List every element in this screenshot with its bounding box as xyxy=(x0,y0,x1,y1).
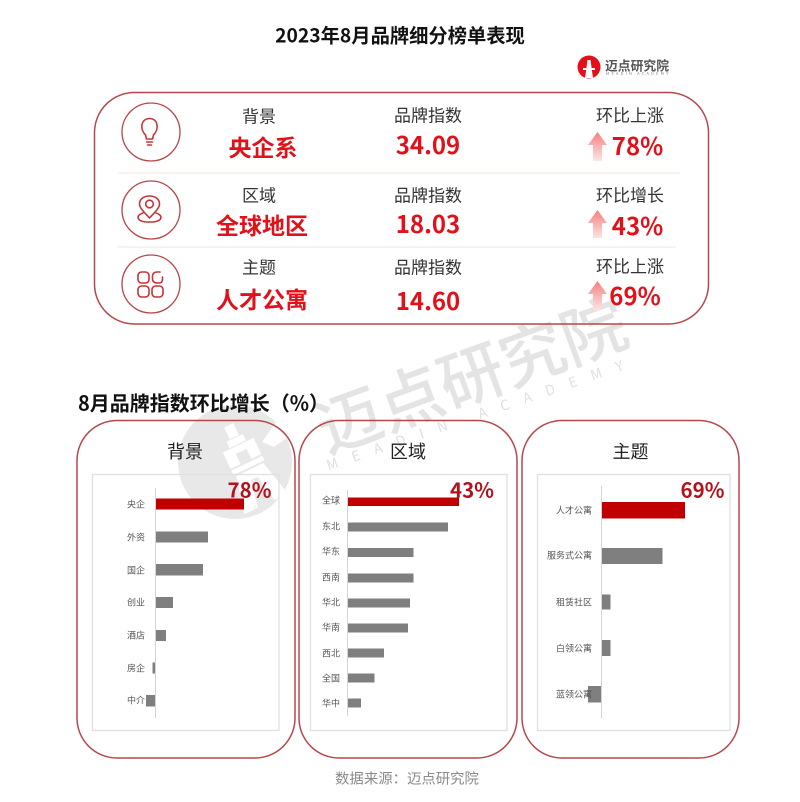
bar chart: 人才公寓 xyxy=(556,504,592,516)
row value: 人才公寓: 人才公寓 xyxy=(216,281,308,315)
bar chart xyxy=(127,474,272,718)
row label: 区域: 区域 xyxy=(242,182,276,206)
section heading: 8月品牌指数环比增长（%） xyxy=(78,388,329,416)
bar chart: 房企 xyxy=(127,662,145,674)
panel heading: 区域 xyxy=(390,438,426,464)
bar chart: 华北 xyxy=(322,596,340,608)
title: 2023年8月品牌细分榜单表现 xyxy=(275,20,525,48)
brand index label row 3: 品牌指数 xyxy=(394,254,462,278)
icon: light bulb xyxy=(122,103,180,161)
panel heading: 主题 xyxy=(612,438,648,464)
bar chart xyxy=(322,474,494,716)
bar chart: 服务式公寓 xyxy=(547,548,592,562)
watermark: 迈点研究院 xyxy=(301,272,639,472)
bar chart: 全球 xyxy=(322,494,340,506)
brand index value row 1: 34.09 xyxy=(396,126,460,161)
bar chart: 华东 xyxy=(322,544,340,558)
change label row 2: 环比增长 xyxy=(596,182,664,206)
change value row 2: 43% xyxy=(612,207,663,242)
bar chart: 东北 xyxy=(322,520,340,532)
bar chart: 创业 xyxy=(127,596,145,608)
panel: 主题 xyxy=(522,420,739,758)
bar chart: 国企 xyxy=(127,564,145,576)
row label: 主题: 主题 xyxy=(242,254,276,278)
data source: 数据来源：迈点研究院 xyxy=(335,768,479,788)
row label: 背景: 背景 xyxy=(242,102,276,128)
bar chart: 租赁社区 xyxy=(556,596,592,608)
icon: grid xyxy=(122,255,180,313)
change value row 1: 78% xyxy=(612,127,663,162)
bar chart: 69% xyxy=(681,474,725,504)
panel: 区域 xyxy=(299,420,517,758)
bar chart: 华中 xyxy=(322,696,340,710)
bar chart: 白领公寓 xyxy=(556,642,592,654)
watermark xyxy=(178,272,640,519)
bar chart: 西北 xyxy=(322,646,340,660)
change label row 3: 环比上涨 xyxy=(596,252,664,278)
change value row 3: 69% xyxy=(609,277,661,312)
panel: 背景 xyxy=(77,420,295,758)
panel heading: 背景 xyxy=(167,438,203,464)
change label row 1: 环比上涨 xyxy=(596,102,664,126)
brand index label row 2: 品牌指数 xyxy=(394,182,462,206)
bar chart: 43% xyxy=(450,474,494,504)
bar chart: 全国 xyxy=(322,672,340,684)
icon: up arrow row 3 xyxy=(588,281,607,310)
bar chart: 外资 xyxy=(127,530,145,544)
brand index value row 3: 14.60 xyxy=(396,282,460,317)
bar chart: 央企 xyxy=(127,498,145,510)
bar chart: 78% xyxy=(228,474,272,504)
panel: top summary xyxy=(94,92,708,324)
logo: Meadin Academy: MEADIN ACADEMY xyxy=(606,71,670,77)
bar chart: 中介 xyxy=(127,694,145,706)
bar chart: 酒店 xyxy=(127,628,145,642)
icon: location pin xyxy=(122,181,180,239)
row value: 全球地区: 全球地区 xyxy=(216,207,308,241)
bar chart: 蓝领公寓 xyxy=(556,688,592,700)
bar chart: 西南 xyxy=(322,570,340,584)
watermark: MEADIN ACADEMY xyxy=(324,351,640,475)
icon: up arrow row 1 xyxy=(588,132,607,161)
icon: up arrow row 2 xyxy=(588,210,607,238)
brand index label row 1: 品牌指数 xyxy=(394,102,462,126)
logo: Meadin Academy xyxy=(578,56,670,78)
bar chart xyxy=(547,474,725,718)
row value: 央企系: 央企系 xyxy=(228,129,298,163)
logo: Meadin Academy: 迈点研究院 xyxy=(605,56,669,74)
bar chart: 华南 xyxy=(322,620,340,634)
brand index value row 2: 18.03 xyxy=(396,205,460,240)
